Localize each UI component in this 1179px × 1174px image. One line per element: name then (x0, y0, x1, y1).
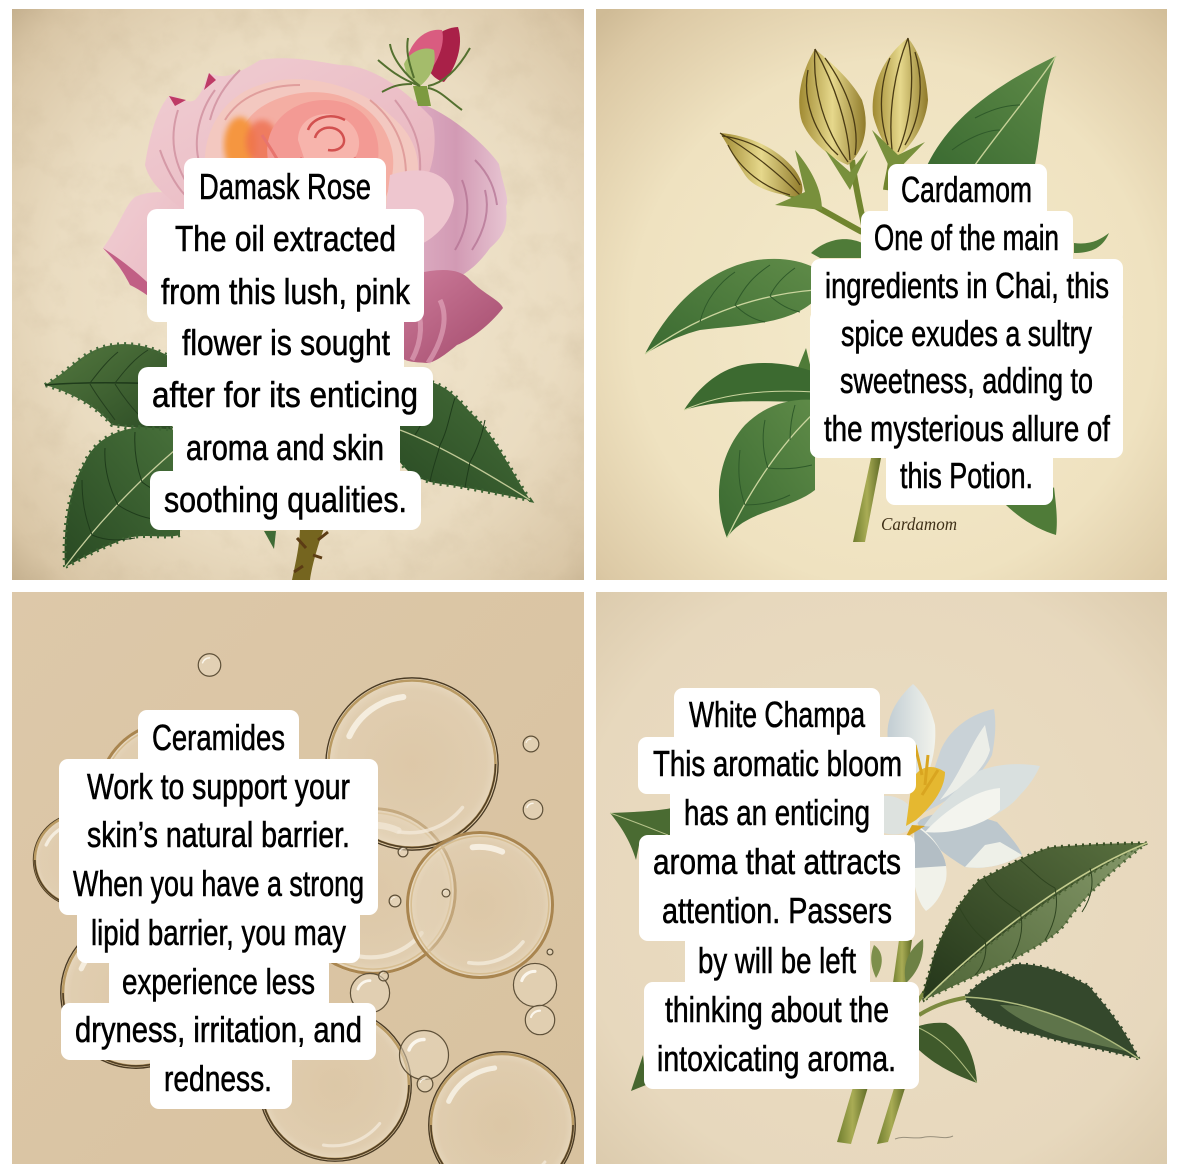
body text: Ceramides: experience less (122, 961, 315, 1002)
body text: Cardamom: sweetness, adding to (840, 360, 1093, 401)
body text: Ceramides: redness. (164, 1058, 272, 1099)
panel background (12, 592, 584, 1164)
icon: rose bloom (103, 58, 507, 363)
body text: Damask Rose: soothing qualities. (164, 479, 407, 520)
signature scribble (895, 1136, 953, 1139)
icon: rose bud (378, 27, 470, 110)
icon: small bud (871, 945, 882, 978)
body text: White Champa: This aromatic bloom (653, 743, 902, 784)
body text: Damask Rose (152, 218, 418, 520)
panel background (596, 9, 1167, 580)
body text: Damask Rose: from this lush, pink (161, 271, 411, 312)
icon: left leaf (645, 259, 815, 354)
icon: stems (837, 940, 970, 1144)
icon: bud three (720, 133, 822, 210)
bubbles (33, 654, 576, 1174)
icon: small lower left leaf (631, 1055, 646, 1091)
icon: top right leaf (925, 56, 1056, 170)
body text: White Champa: intoxicating aroma. (657, 1038, 896, 1079)
body text: Cardamom: spice exudes a sultry (841, 313, 1092, 354)
body text: Ceramides: lipid barrier, you may (91, 912, 346, 953)
icon: third leaf (919, 1023, 977, 1083)
text block: White Champa (638, 688, 919, 1089)
icon: lower left leaf (719, 400, 815, 538)
body text: Ceramides: dryness, irritation, and (75, 1009, 362, 1050)
body text: Ceramides (73, 766, 364, 1099)
body text: White Champa: attention. Passers (662, 890, 892, 931)
body text: White Champa: has an enticing (684, 792, 870, 833)
rose stem (264, 525, 328, 580)
body text: Damask Rose: The oil extracted (175, 218, 396, 259)
body text: White Champa: by will be left (698, 940, 856, 981)
heading: Cardamom: Cardamom (901, 169, 1032, 210)
body text: Damask Rose: after for its enticing (152, 374, 418, 415)
text block: Damask Rose (138, 158, 433, 530)
icon: small leaves (791, 233, 1109, 535)
panel: Ceramides (12, 592, 584, 1174)
body text: Damask Rose: flower is sought (182, 322, 390, 363)
body text: Cardamom (824, 217, 1111, 496)
icon: middle left leaf (684, 363, 815, 410)
heading: White Champa: White Champa (689, 694, 866, 735)
icon: small leaf near stem (905, 939, 923, 983)
text block: Cardamom (810, 164, 1123, 505)
icon: main stem (853, 458, 881, 542)
body text: White Champa (653, 743, 902, 1079)
panel: Cardamom (596, 9, 1167, 580)
icon: bud one (799, 49, 868, 190)
icon: stems of buds (782, 160, 890, 235)
icon: upper left rose leaf (45, 344, 172, 430)
panel background: aged paper (12, 9, 584, 580)
panel: White Champa (596, 592, 1167, 1164)
icon: white champa flower (884, 684, 1040, 911)
heading: Ceramides: Ceramides (152, 717, 285, 758)
body text: White Champa: aroma that attracts (653, 841, 901, 882)
body text: White Champa: thinking about the (665, 989, 889, 1030)
body text: Cardamom: this Potion. (900, 455, 1033, 496)
body text: Ceramides: When you have a strong (73, 863, 364, 904)
panel background (596, 592, 1167, 1164)
icon: second leaf (965, 964, 1139, 1059)
body text: Ceramides: Work to support your (87, 766, 350, 807)
icon: large leaf (923, 843, 1147, 1000)
icon: left leaf (610, 808, 672, 860)
heading: Damask Rose: Damask Rose (199, 166, 371, 207)
panel: Damask Rose (12, 9, 584, 580)
icon: lower left rose leaf (65, 427, 180, 567)
body text: Ceramides: skin’s natural barrier. (87, 814, 350, 855)
icon: right rose leaf (395, 380, 530, 500)
body text: Cardamom: One of the main (874, 217, 1059, 258)
icon: bud two (872, 38, 928, 175)
body text: Damask Rose: aroma and skin (186, 427, 384, 468)
label: handwritten plant name: Cardamom (881, 514, 957, 534)
text block: Ceramides (59, 710, 378, 1109)
